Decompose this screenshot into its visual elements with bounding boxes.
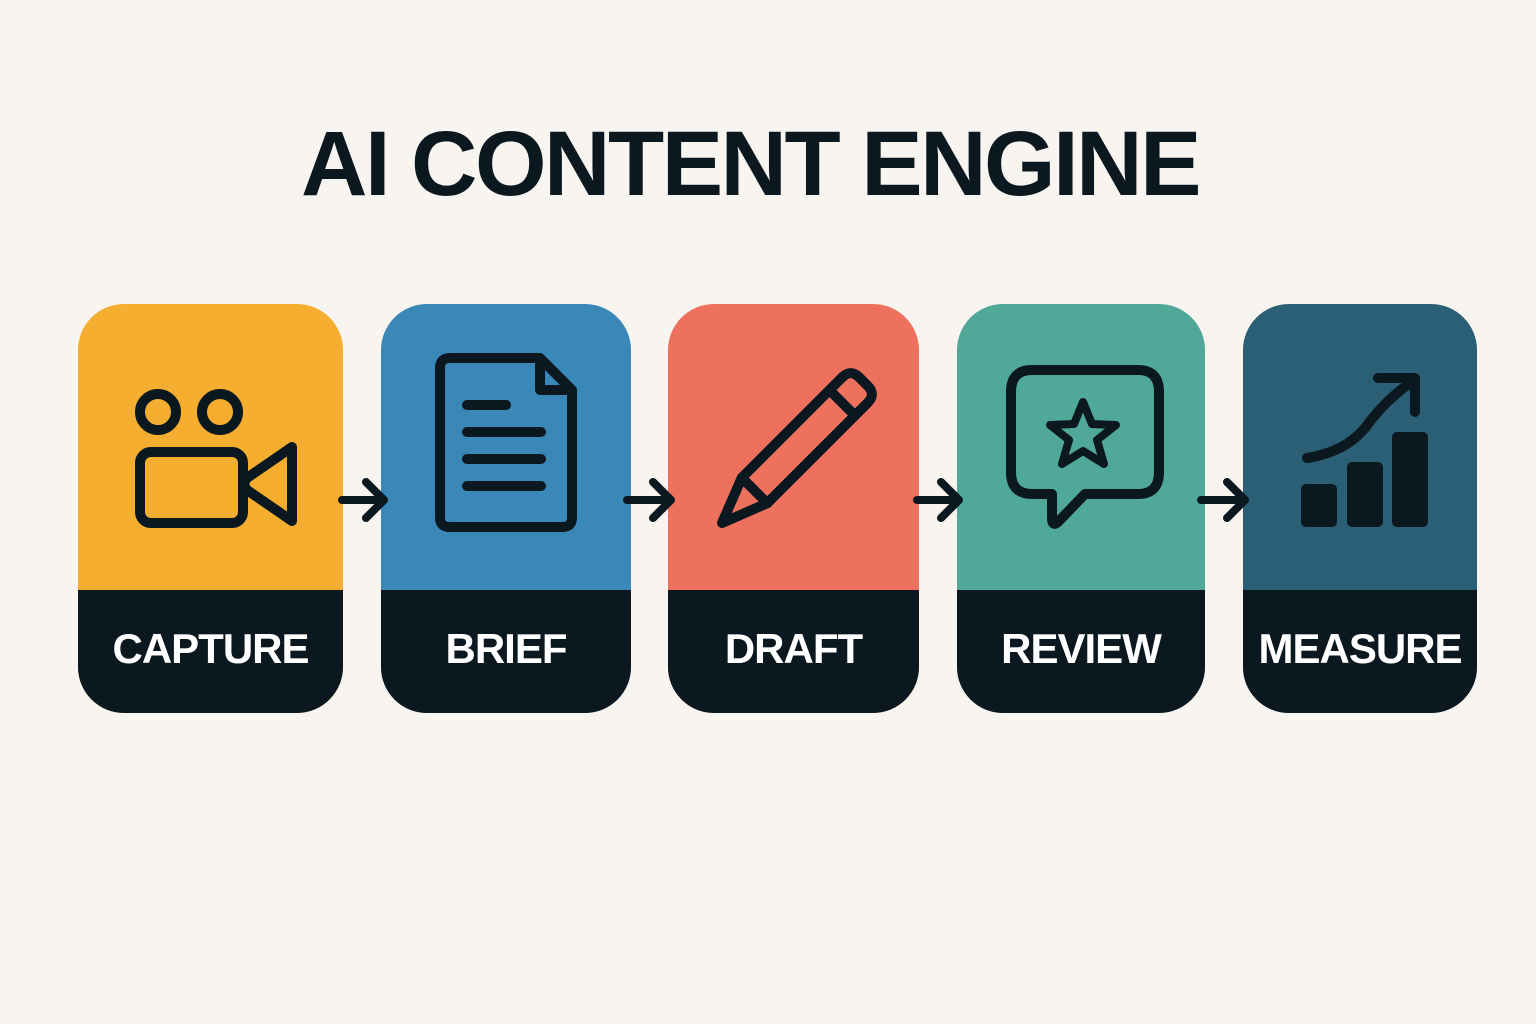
card: measure — [1243, 304, 1477, 713]
arrow 3 — [917, 482, 959, 518]
card: draft — [668, 304, 919, 713]
card: review — [957, 304, 1205, 713]
label: draft — [668, 590, 919, 713]
icon: document — [440, 358, 572, 527]
label: capture: CAPTURE — [112, 625, 308, 672]
card: capture — [78, 304, 343, 713]
label: review: REVIEW — [1001, 625, 1161, 672]
label: brief: BRIEF — [446, 625, 566, 672]
label: review — [957, 590, 1205, 713]
card: brief — [381, 304, 631, 713]
arrow 4 — [1201, 482, 1245, 518]
arrow 1 — [342, 482, 384, 518]
label: brief — [381, 590, 631, 713]
arrow 2 — [627, 482, 671, 518]
icon: growth chart — [1301, 378, 1428, 527]
label: measure — [1243, 590, 1477, 713]
icon: speech bubble with star — [1011, 370, 1159, 524]
icon: pencil — [709, 369, 876, 536]
label: draft: DRAFT — [725, 625, 862, 672]
label: measure: MEASURE — [1258, 625, 1462, 672]
icon: camera — [140, 394, 292, 523]
label: capture — [78, 590, 343, 713]
title: AI CONTENT ENGINE — [301, 113, 1199, 215]
